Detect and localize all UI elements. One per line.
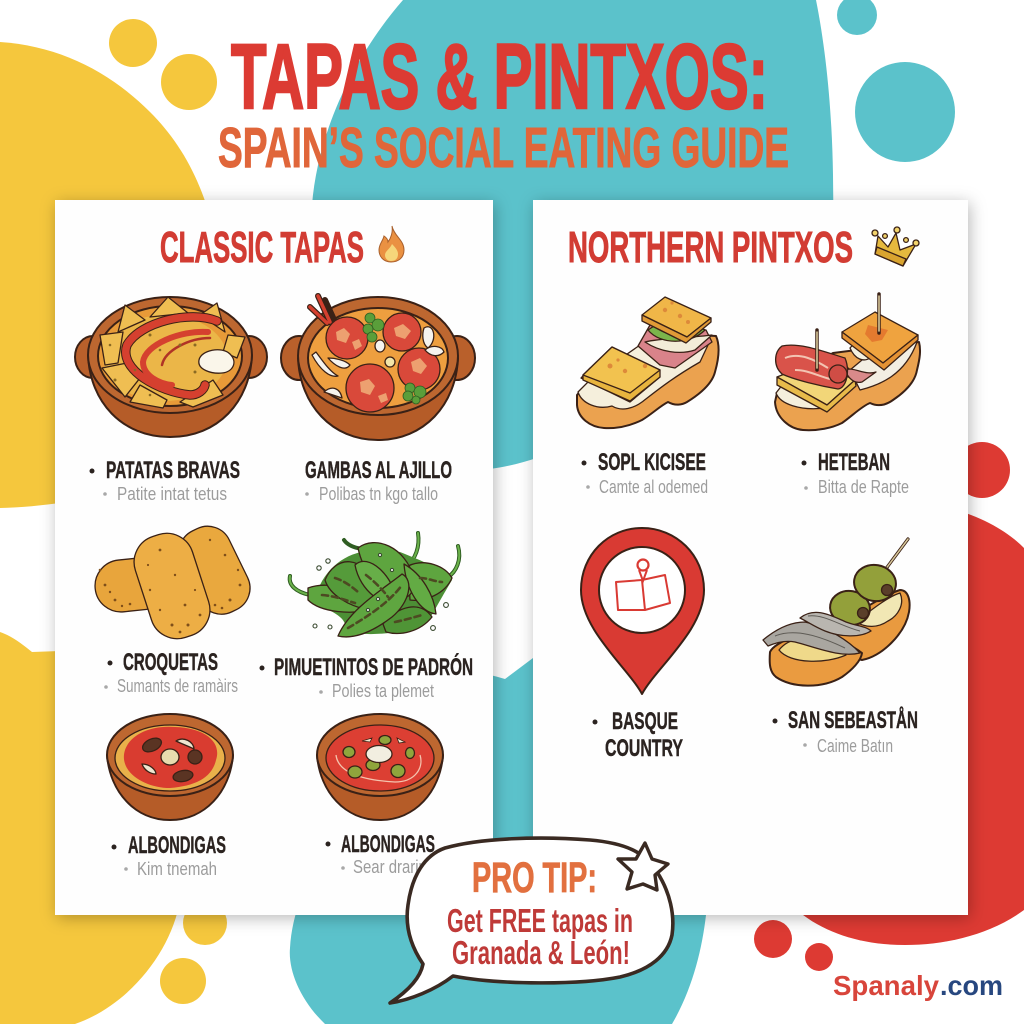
brand wordmark: .com (940, 970, 1003, 1001)
label: basque country: COUNTRY (605, 735, 683, 762)
label: patatas bravas: PATATAS BRAVAS (106, 457, 240, 484)
callout: pro tip speech bubble (390, 838, 673, 1003)
panel: northern pintxos (533, 200, 968, 915)
pro tip heading: PRO TIP: (472, 854, 597, 902)
dish: pintxo two illustration (775, 294, 920, 430)
label: patatas bravas (90, 457, 240, 504)
pro tip body (447, 902, 633, 971)
icon: map location pin (581, 528, 704, 694)
label: san sebastian: SAN SEBEASTÅN (788, 706, 918, 734)
brand wordmark (833, 970, 1003, 1001)
dish: olive tomato bowl illustration (317, 714, 443, 820)
label: croquetas (104, 649, 238, 696)
heading: northern pintxos: NORTHERN PINTXOS (568, 223, 853, 272)
label: albondigas right: ALBONDIGAS (341, 831, 435, 858)
label: patatas bravas: Patite intat tetus (117, 484, 227, 504)
label: sopl kicisee (582, 449, 708, 497)
dish: croquetas illustration (92, 518, 258, 646)
label: albondigas left: Kim tnemah (137, 859, 217, 879)
label: san sebastian (772, 706, 918, 756)
title (218, 26, 789, 180)
label: albondigas left (112, 832, 226, 879)
label: croquetas: CROQUETAS (123, 649, 218, 676)
label: sopl kicisee: Camte al odemed (599, 477, 708, 497)
icon: flame (379, 226, 404, 262)
label: pimientos de padron: PIMUETINTOS DE PADRÓN (274, 653, 473, 681)
label: san sebastian: Caime Batın (817, 736, 893, 756)
label: albondigas right: Sear drarim (353, 857, 431, 877)
label: gambas al ajillo: GAMBAS AL AJILLO (305, 457, 452, 484)
dish: pimientos de padron illustration (290, 533, 459, 637)
pro tip body: Get FREE tapas in (447, 902, 633, 939)
label: sopl kicisee: SOPL KICISEE (598, 449, 706, 476)
label: croquetas: Sumants de ramàirs (117, 676, 238, 696)
dish: anchovy olive pintxo illustration (763, 539, 910, 686)
panel: classic tapas (55, 200, 493, 915)
label: heteban: Bitta de Rapte (818, 477, 909, 497)
dish: patatas bravas illustration (75, 297, 267, 437)
dish: albondigas bowl illustration (107, 714, 233, 820)
icon: crown (872, 227, 919, 266)
label: pimientos de padron (260, 653, 473, 701)
label: heteban: HETEBAN (818, 449, 890, 476)
heading: classic tapas: CLASSIC TAPAS (160, 223, 364, 272)
dish: gambas al ajillo illustration (281, 296, 475, 440)
pro tip body: Granada & León! (452, 934, 630, 971)
label: heteban (802, 449, 909, 497)
label: gambas al ajillo: Polibas tn kgo tallo (319, 484, 438, 504)
label: albondigas right (326, 831, 435, 877)
label: basque country: BASQUE (612, 708, 678, 735)
label: basque country (592, 708, 683, 762)
label: pimientos de padron: Polies ta plemet (332, 681, 434, 701)
dish: pintxo one illustration (577, 297, 719, 428)
label: albondigas left: ALBONDIGAS (128, 832, 226, 859)
brand wordmark: Spanaly (833, 970, 939, 1001)
label: gambas al ajillo (305, 457, 452, 504)
icon: star (618, 843, 668, 890)
